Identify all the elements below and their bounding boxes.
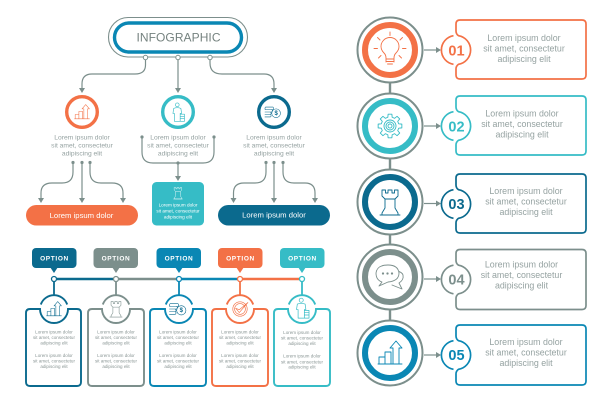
text: middle branch: adipiscing elit: [158, 150, 198, 158]
option column 2: Lorem ipsum dolor: [97, 353, 135, 358]
arrows: left branch to orange pill: [38, 161, 126, 203]
step 02: 02: [448, 120, 465, 136]
step 01: sit amet, consectetur: [483, 44, 565, 54]
teal box: sit amet, consectetur: [156, 208, 200, 214]
panel: title and three-branch flow: [26, 18, 330, 226]
icon: teal person circle: [163, 97, 193, 127]
option column 5: adipiscing elit: [288, 341, 316, 346]
option column 2: Lorem ipsum dolor: [97, 329, 135, 334]
text: left branch: [51, 134, 114, 158]
option column 3: OPTION: [165, 256, 193, 262]
option column 2: adipiscing elit: [102, 340, 130, 345]
arrows: middle bracket to teal box: [140, 135, 216, 181]
option column 1: Lorem ipsum dolor: [35, 329, 73, 334]
panel: five option timeline: [26, 248, 330, 386]
step 04: sit amet, consectetur: [481, 270, 562, 280]
option column 4: Lorem ipsum dolor: [221, 353, 259, 358]
option column 3: Lorem ipsum dolor: [159, 353, 197, 358]
option column 3: adipiscing elit: [164, 340, 192, 345]
timeline: [54, 278, 302, 280]
step 04: Lorem ipsum dolor: [485, 260, 558, 270]
option column 4: Lorem ipsum dolor: [221, 329, 259, 334]
step 01: 01: [448, 44, 465, 60]
option column 1: sit amet, consectetur: [33, 335, 75, 340]
text: left branch: sit amet, consectetur: [51, 142, 114, 150]
step 03: adipiscing elit: [499, 207, 553, 217]
text: right branch: adipiscing elit: [254, 150, 294, 158]
step 05: adipiscing elit: [499, 358, 553, 368]
option column 2: sit amet, consectetur: [95, 335, 137, 340]
panel: numbered list: [358, 18, 586, 386]
dark blue pill: Lorem ipsum dolor: [242, 210, 306, 220]
option column 5: adipiscing elit: [288, 365, 316, 370]
text: middle branch: sit amet, consectetur: [147, 142, 210, 150]
option column 1: [26, 248, 81, 386]
step 03: sit amet, consectetur: [485, 196, 567, 206]
icon: chat bubbles: [376, 265, 403, 289]
option column 3: [150, 248, 206, 386]
text: middle branch: [147, 134, 210, 158]
option column 3: adipiscing elit: [164, 364, 192, 369]
option column 5: Lorem ipsum dolor: [283, 330, 321, 335]
text: left branch: Lorem ipsum dolor: [54, 134, 110, 142]
orange pill: Lorem ipsum dolor: [50, 211, 114, 220]
option column 4: [212, 248, 268, 386]
icon: light bulb: [374, 32, 406, 64]
text: right branch: sit amet, consectetur: [243, 142, 306, 150]
option column 5: [274, 248, 330, 386]
teal box: Lorem ipsum dolor: [159, 202, 198, 208]
step 04: [358, 244, 586, 310]
step 03: [358, 170, 586, 234]
option column 4: adipiscing elit: [226, 364, 254, 369]
option column 1: sit amet, consectetur: [33, 359, 75, 364]
arrow: title to teal branch: [175, 55, 181, 93]
option column 4: adipiscing elit: [226, 340, 254, 345]
option column 3: $: [180, 308, 184, 314]
text: right branch: [243, 134, 306, 158]
option column 1: OPTION: [40, 256, 69, 262]
option column 3: Lorem ipsum dolor: [159, 329, 197, 334]
option column 4: sit amet, consectetur: [219, 359, 261, 364]
icon: gear: [378, 114, 402, 138]
icon: dark blue coins circle: $: [275, 111, 279, 117]
option column 2: OPTION: [102, 256, 130, 262]
teal box: [152, 182, 204, 226]
step 05: 05: [448, 348, 465, 364]
option column 5: sit amet, consectetur: [281, 336, 323, 341]
title badge: [108, 18, 248, 57]
icon: dark blue coins circle: [259, 97, 289, 127]
step 04: 04: [448, 272, 465, 288]
option column 2: adipiscing elit: [102, 364, 130, 369]
arrow: title to orange branch: [79, 55, 148, 93]
vertical connectors: [389, 82, 391, 321]
step 02: [358, 94, 586, 158]
step 04: adipiscing elit: [495, 280, 549, 290]
option column 5: OPTION: [288, 256, 317, 262]
teal box: adipiscing elit: [164, 214, 193, 220]
step 05: Lorem ipsum dolor: [489, 337, 563, 347]
option column 4: sit amet, consectetur: [219, 335, 261, 340]
text: left branch: adipiscing elit: [62, 150, 102, 158]
text: middle branch: Lorem ipsum dolor: [150, 134, 206, 142]
option column 1: adipiscing elit: [40, 364, 68, 369]
option column 1: adipiscing elit: [40, 340, 68, 345]
icon: orange growth chart circle: [67, 97, 97, 127]
option column 2: [88, 248, 144, 386]
step 05: [358, 320, 586, 386]
orange pill: [26, 205, 138, 226]
title badge: INFOGRAPHIC: [136, 30, 221, 44]
step 05: sit amet, consectetur: [485, 348, 567, 358]
step 01: Lorem ipsum dolor: [487, 33, 561, 43]
option column 3: sit amet, consectetur: [157, 335, 199, 340]
step 02: adipiscing elit: [495, 130, 549, 140]
option column 2: sit amet, consectetur: [95, 359, 137, 364]
step 02: Lorem ipsum dolor: [485, 108, 559, 118]
option column 3: sit amet, consectetur: [157, 359, 199, 364]
step 01: [358, 18, 586, 82]
option column 5: sit amet, consectetur: [281, 359, 323, 364]
step 03: 03: [448, 197, 465, 213]
option column 5: Lorem ipsum dolor: [283, 354, 321, 359]
step 03: Lorem ipsum dolor: [489, 186, 563, 196]
arrow: title to dark blue branch: [208, 55, 277, 93]
option column 1: Lorem ipsum dolor: [35, 353, 73, 358]
step 01: adipiscing elit: [497, 54, 551, 64]
arrows: right branch to dark blue pill: [230, 161, 318, 203]
step 02: sit amet, consectetur: [481, 119, 563, 129]
text: right branch: Lorem ipsum dolor: [246, 134, 302, 142]
option column 4: OPTION: [226, 256, 255, 262]
dark blue pill: [218, 205, 330, 226]
